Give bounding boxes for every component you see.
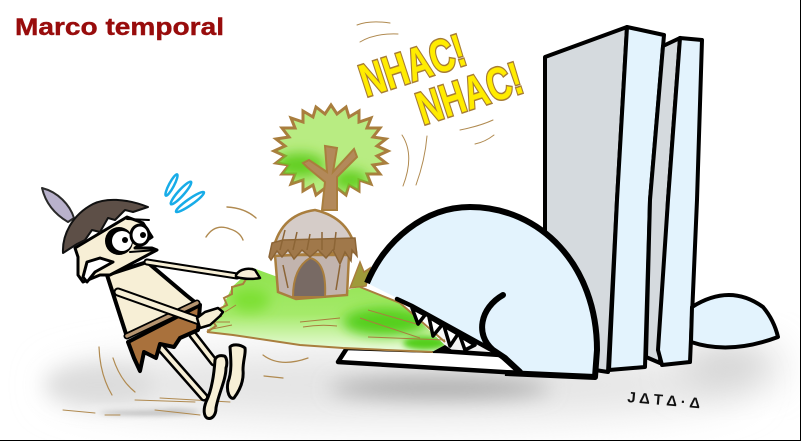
sound effect: NHAC! NHAC!: NHAC! xyxy=(410,52,529,135)
hut xyxy=(269,210,357,299)
belt xyxy=(127,303,197,336)
sound effect: NHAC! NHAC!: NHAC! xyxy=(353,24,472,107)
mouth floor xyxy=(338,348,520,373)
feather xyxy=(42,188,74,222)
building: blue face 1 xyxy=(609,27,664,370)
foot right xyxy=(204,356,227,418)
small dome xyxy=(691,295,778,347)
large dome jaw xyxy=(367,207,597,377)
dome inner curve xyxy=(482,295,520,372)
indigenous man fleeing xyxy=(42,188,260,418)
teeth xyxy=(412,308,475,350)
upper arm and hand xyxy=(147,262,237,276)
building: gray side xyxy=(545,27,627,372)
foot left xyxy=(227,345,245,398)
eyes xyxy=(105,227,133,255)
face xyxy=(75,217,157,282)
icon: blue sweat drops xyxy=(164,173,206,214)
tunic xyxy=(107,262,196,337)
building: blue face 2 xyxy=(658,38,702,365)
upper jaw line xyxy=(397,299,497,353)
hair xyxy=(63,200,148,253)
building: gray side 2 xyxy=(646,38,680,363)
title: Marco temporal xyxy=(15,14,224,41)
sound effect: NHAC! NHAC! xyxy=(353,24,529,135)
motion lines xyxy=(63,22,494,415)
legs xyxy=(160,335,214,397)
lower arm and hand xyxy=(118,292,205,323)
skirt xyxy=(128,305,200,371)
signature: JΔTΔ·Δ xyxy=(627,389,701,412)
grass tuft behind hut xyxy=(350,262,370,288)
ground shadow xyxy=(45,348,780,421)
Planalto building xyxy=(545,27,702,372)
tree xyxy=(274,105,388,210)
grass land xyxy=(207,262,447,352)
mouth xyxy=(83,258,113,282)
